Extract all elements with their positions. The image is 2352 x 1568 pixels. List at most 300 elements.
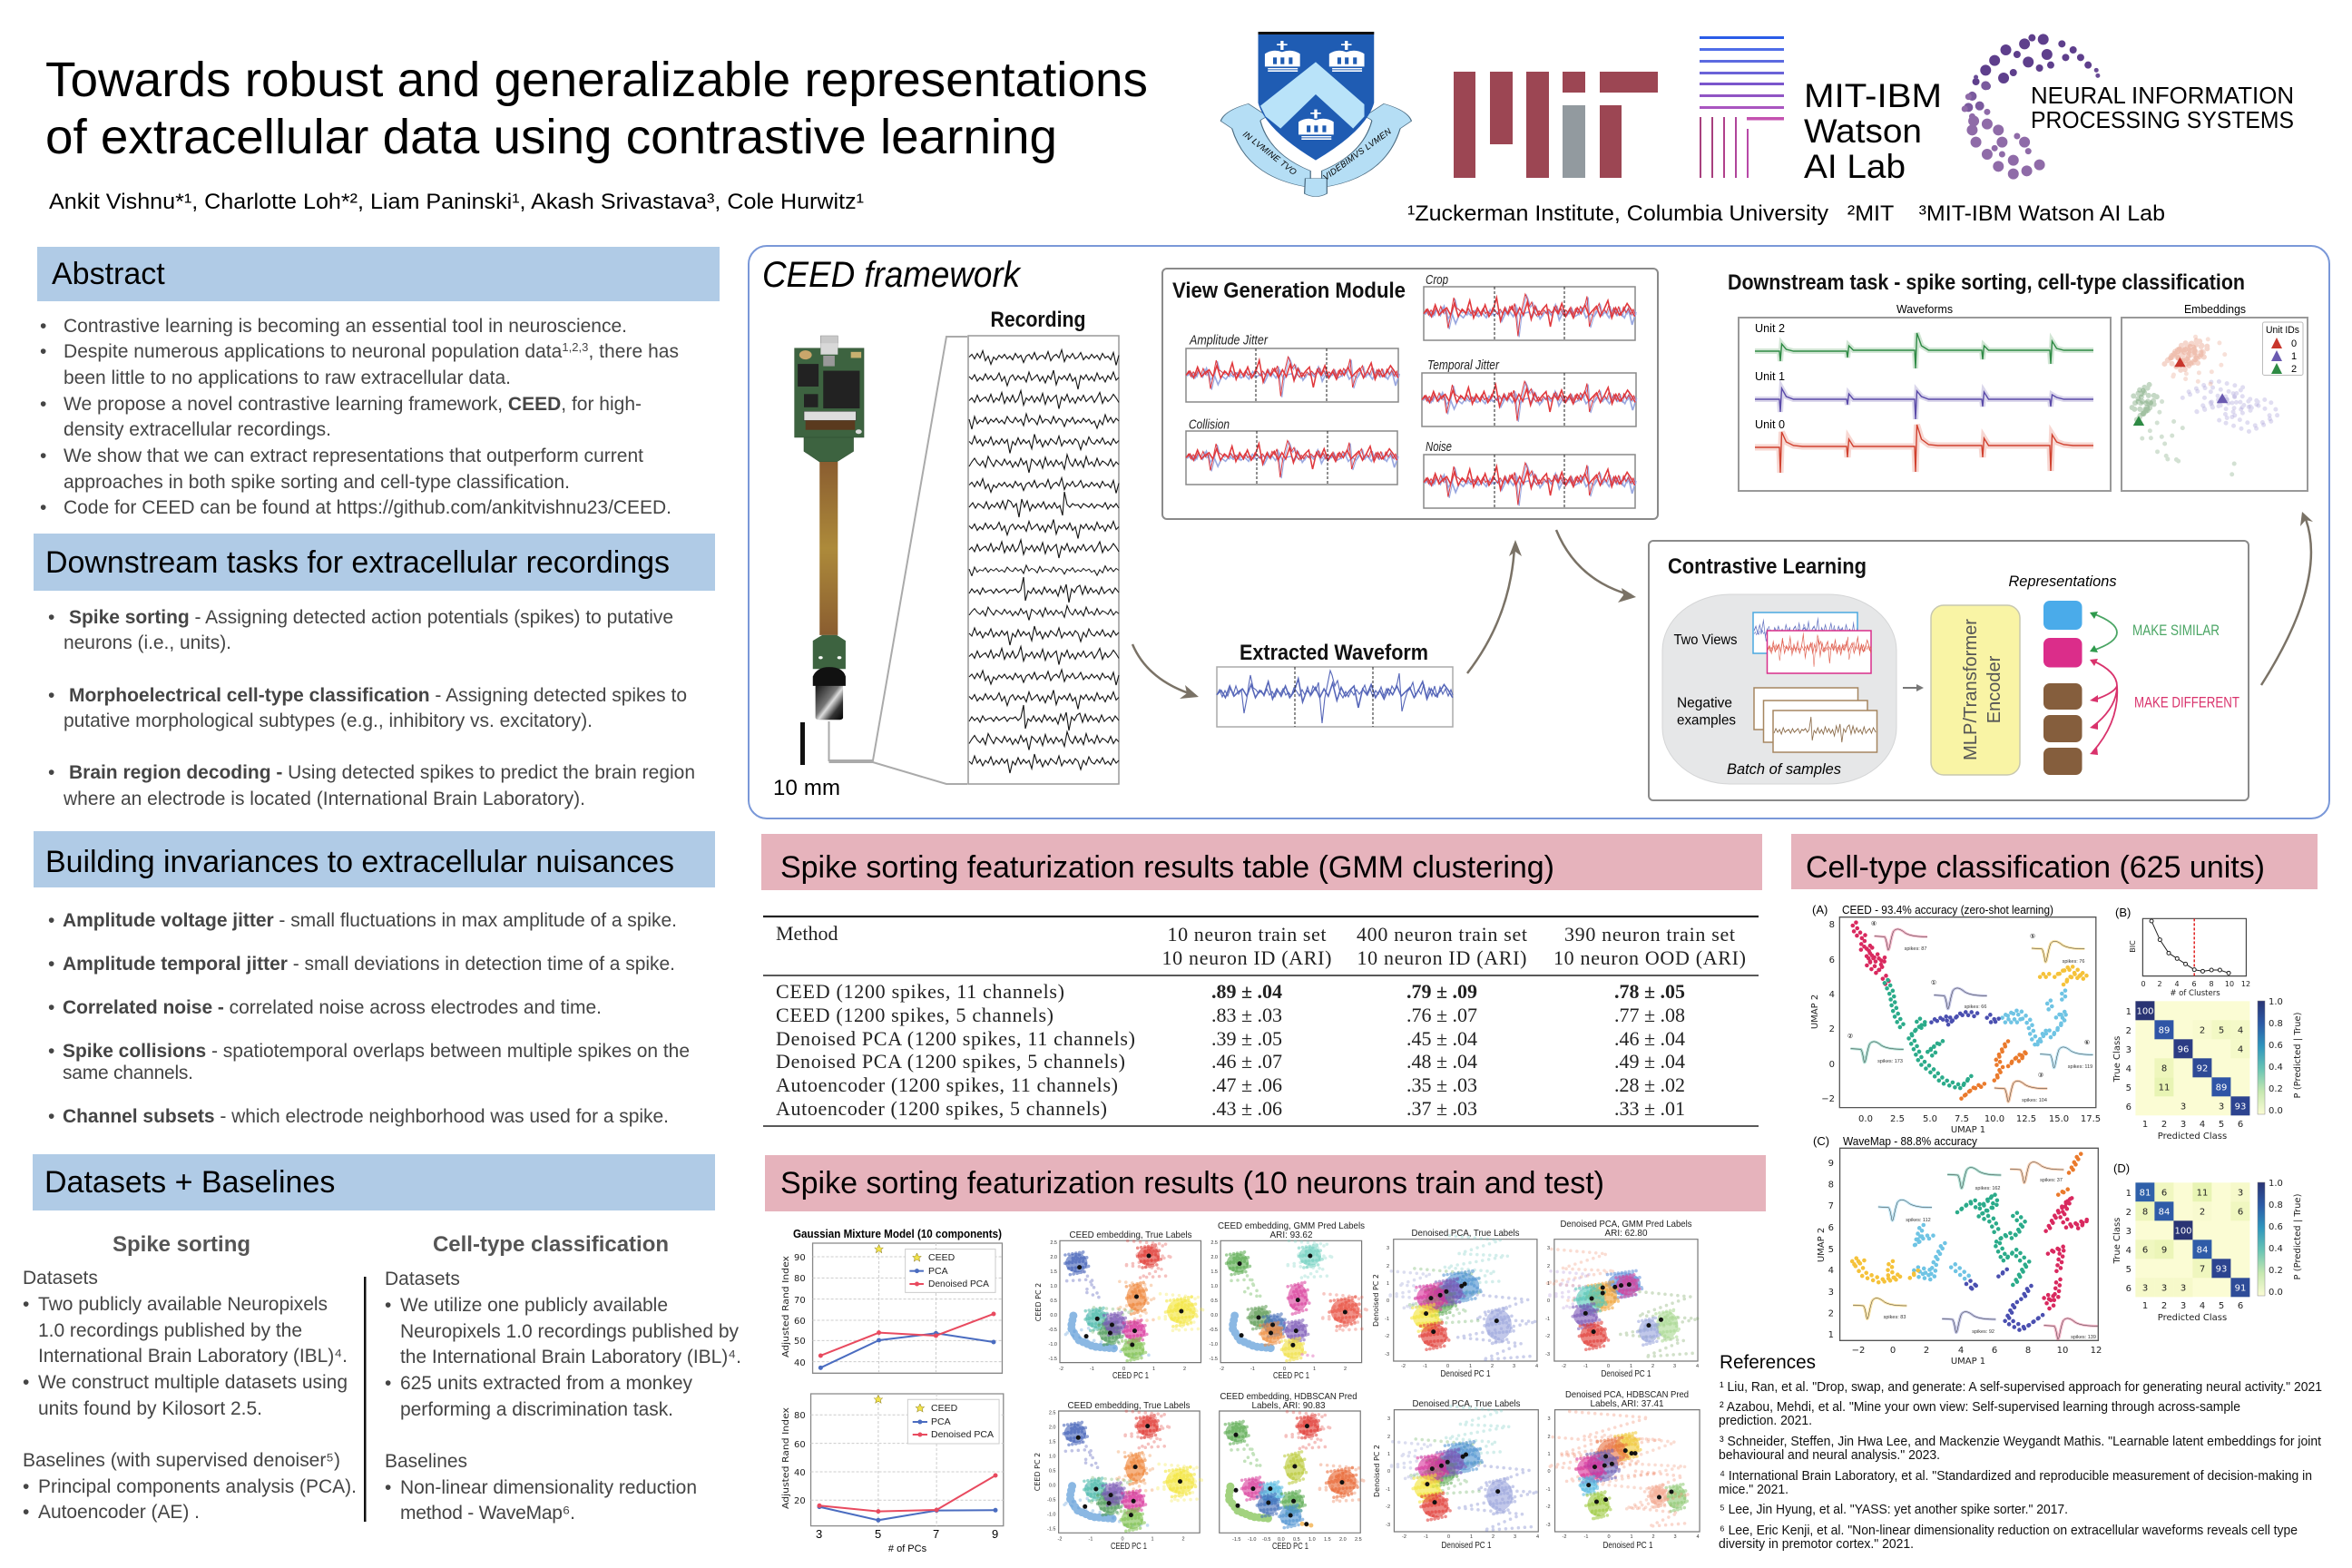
colorbar: P (Predicted | True) [2293,1012,2303,1098]
chart (C): WaveMap UMAP: spikes: 83 [1884,1315,1906,1320]
chart (D): confusion matrix WaveMap: 5 [2219,1301,2224,1311]
colorbar: 0.8 [2269,1019,2283,1029]
chart: denoised PCA HDBSCAN predicted labels [1546,1389,1700,1551]
chart: GMM line plot: 50 [794,1337,806,1347]
downstream text: neurons (i.e., units). [64,632,231,653]
abstract text: , there has [588,341,679,362]
chart (A): CEED UMAP: ⑥ [2084,1039,2090,1046]
panel: building invariances [34,831,715,1127]
column: spike sorting: • [23,1476,29,1497]
chart (A): CEED UMAP: 4 [1829,990,1835,1000]
chart (D): confusion matrix WaveMap: 1 [2126,1189,2132,1199]
chart: GMM line plot: 90 [794,1253,806,1263]
colorbar: 0.6 [2269,1041,2283,1051]
chart (B): BIC curve: 6 [2191,980,2197,988]
chart (C): WaveMap UMAP: 8 [1828,1180,1834,1191]
chart (D): confusion matrix WaveMap: 6 [2238,1207,2243,1218]
chart (D): confusion matrix WaveMap: 2 [2161,1301,2167,1311]
datasets heading: Datasets + Baselines [44,1165,335,1200]
invariances text: • [48,1106,54,1127]
chart: CEED embedding true labels (GMM): CEED PC 2 [1034,1283,1043,1321]
chart (B): BIC curve: 12 [2241,980,2250,988]
column: cell-type classification: • [385,1477,391,1498]
chart (A): CEED UMAP: 5.0 [1923,1114,1937,1124]
results table: .33 ± .01 [1614,1097,1685,1120]
results table: .46 ± .07 [1211,1050,1282,1073]
references: ⁴ International Brain Laboratory, et al. "Standardized and reproducible measurement of decision-making in [1720,1468,2312,1484]
title: Towards robust and generalizable representations [45,53,1148,107]
column: spike sorting: Datasets [23,1268,98,1289]
chart (D): confusion matrix WaveMap: True Class [2112,1218,2122,1264]
references: ² Azabou, Mehdi, et al. "Mine your own view: Self-supervised learning through across-sample [1720,1399,2240,1415]
chart (D): confusion matrix WaveMap: 4 [2200,1301,2205,1311]
results table: Autoencoder (1200 spikes, 5 channels) [776,1097,1107,1120]
recording traces: Recording [991,308,1085,332]
chart (B): BIC curve: 8 [2209,980,2214,988]
chart: confusion matrix CEED: 3 [2180,1120,2186,1130]
invariances heading [34,831,715,887]
chart: unit waveforms: Unit 1 [1755,369,1785,383]
arrow: extracted waveform to view generation [1467,540,1522,673]
abstract text: • [40,316,46,337]
chart: confusion matrix CEED: 89 [2159,1025,2170,1036]
chart (A): CEED UMAP: 17.5 [2081,1114,2101,1124]
chart: denoised PCA GMM predicted labels: Denoised PC 1 [1601,1368,1651,1379]
chart (A): CEED UMAP [1810,903,2101,1135]
invariances text: • [48,954,54,975]
chart: GMM line plot: 70 [794,1296,806,1306]
view: crop [1424,273,1636,340]
results table: CEED (1200 spikes, 5 channels) [776,1004,1054,1026]
chart: CEED embedding HDBSCAN predicted labels: -1.0 [1248,1537,1256,1543]
abstract text [40,316,679,518]
chart: denoised PCA GMM predicted labels: Denoised PCA, GMM Pred Labels [1561,1219,1691,1230]
column: cell-type classification: performing a discrimination task. [400,1399,673,1420]
crest motto: IN LVMINE TVO [1240,130,1298,178]
chart: confusion matrix CEED: 3 [2180,1102,2186,1112]
results table: Denoised PCA (1200 spikes, 5 channels) [776,1050,1125,1073]
heading: featurization results [765,1155,1766,1211]
chart: HDBSCAN line plot: 60 [794,1440,806,1450]
chart: confusion matrix CEED: 92 [2197,1063,2208,1074]
chart: CEED embedding true labels (HDBSCAN): CEED embedding, True Labels [1067,1400,1191,1411]
column: spike sorting: Two publicly available Neuropixels [38,1294,328,1315]
icon: MIT-IBM Watson AI Lab logo: AI Lab [1804,148,1906,185]
column: cell-type classification: 625 units extracted from a monkey [400,1373,693,1394]
chart (C): WaveMap UMAP: 12 [2091,1346,2102,1356]
downstream text: • [48,607,54,628]
column: cell-type classification: We utilize one publicly available [400,1295,668,1316]
affiliations: ¹Zuckerman Institute, Columbia University ²MIT ³MIT-IBM Watson AI Lab [1407,201,2165,226]
references: prediction. 2021. [1719,1413,1812,1428]
view: temporal jitter [1422,358,1637,426]
chart (B): BIC curve: # of Clusters [2170,989,2220,998]
chart: confusion matrix CEED: 2 [2200,1025,2205,1036]
chart (A): CEED UMAP: 7.5 [1955,1114,1969,1124]
results table: .39 ± .05 [1211,1027,1282,1050]
chart: unit embeddings [2122,318,2308,491]
results table: Method [776,922,838,945]
results table: 400 neuron train set [1357,923,1527,946]
chart: HDBSCAN line plot: # of PCs [888,1544,927,1554]
panel: CEED framework [749,246,2329,818]
chart: CEED embedding GMM predicted labels: CEED embedding, GMM Pred Labels [1218,1220,1365,1231]
embeddings legend: 0 [2291,338,2297,349]
abstract text: 1,2,3 [562,340,588,354]
chart: GMM line plot: 40 [794,1358,806,1368]
chart: GMM line plot [781,1227,1002,1373]
chart (C): WaveMap UMAP: WaveMap - 88.8% accuracy [1843,1134,1977,1148]
references: behavioural and neural analysis." 2023. [1719,1447,1940,1463]
chart (A): CEED UMAP: ② [1847,1033,1853,1040]
probe leader lines [829,337,967,784]
downstream text: putative morphological subtypes (e.g., inhibitory vs. excitatory). [64,710,593,731]
chart (C): WaveMap UMAP: 9 [1828,1159,1834,1169]
chart (D): confusion matrix WaveMap: 6 [2142,1245,2148,1256]
column: cell-type classification: the International Brain Laboratory (IBL)⁴. [400,1347,741,1367]
results table: .78 ± .05 [1614,980,1685,1003]
downstream text: • [48,685,54,706]
abstract text: Contrastive learning is becoming an essential tool in neuroscience. [64,316,627,337]
chart: CEED embedding GMM predicted labels [1210,1220,1369,1381]
icon: MIT-IBM Watson AI Lab logo [1700,36,1942,185]
chart: denoised PCA true labels (GMM): Denoised PC 1 [1441,1368,1491,1379]
chart: HDBSCAN line plot: PCA [931,1416,951,1427]
column: spike sorting: • [23,1294,29,1315]
chart (A): CEED UMAP: 0.0 [1858,1114,1873,1124]
results table: 10 neuron ID (ARI) [1357,946,1526,969]
colorbar: 0.2 [2269,1084,2283,1094]
chart (A): CEED UMAP: −2 [1821,1094,1835,1104]
chart: confusion matrix CEED: 4 [2126,1064,2132,1074]
chart: CEED embedding HDBSCAN predicted labels: 2.0 [1339,1537,1347,1543]
chart: confusion matrix CEED: 1 [2126,1007,2132,1017]
chart: confusion matrix CEED: 5 [2126,1083,2132,1093]
chart (D): confusion matrix WaveMap: 2 [2200,1207,2205,1218]
downstream text: Brain region decoding - Using detected spikes to predict the brain region [69,762,695,783]
invariances text: Channel subsets - which electrode neighborhood was used for a spike. [63,1106,669,1127]
arrow: batch to encoder [1903,684,1924,691]
panel: abstract [37,247,720,518]
chart (D): confusion matrix WaveMap: 3 [2238,1189,2243,1198]
chart: unit waveforms: Unit 2 [1755,321,1785,335]
chart (D): confusion matrix WaveMap: 3 [2180,1301,2186,1311]
column: spike sorting: • [23,1502,29,1523]
chart (C): WaveMap UMAP: 4 [1958,1346,1964,1356]
chart: denoised PCA true labels (GMM): Denoised PC 2 [1372,1274,1380,1327]
abstract text: We propose a novel contrastive learning framework, CEED, for high- [64,394,642,415]
chart (A): CEED UMAP: spikes: 66 [1965,1004,1986,1010]
panel: view generation module: View Generation Module [1172,279,1406,303]
chart (D): confusion matrix WaveMap: (D) [2113,1161,2130,1175]
results table: CEED (1200 spikes, 11 channels) [776,980,1064,1003]
chart: confusion matrix CEED: 4 [2238,1045,2243,1054]
panel: contrastive learning: Representations [2009,573,2117,590]
abstract text: been little to no applications to raw extracellular data. [64,368,511,388]
panel: downstream task: Embeddings [2184,302,2246,316]
arrow: recording to extracted waveform [1132,644,1199,699]
chart: unit waveforms: Unit 0 [1755,417,1785,431]
chart: denoised PCA HDBSCAN predicted labels: Labels, ARI: 37.41 [1590,1398,1664,1409]
results table: Autoencoder (1200 spikes, 11 channels) [776,1073,1118,1096]
results table: .77 ± .08 [1614,1004,1685,1026]
view: collision: Collision [1189,417,1230,432]
chart: CEED embedding true labels (HDBSCAN): CEED PC 1 [1111,1541,1147,1552]
chart (C): WaveMap UMAP: UMAP 2 [1817,1228,1827,1262]
results table: .35 ± .03 [1406,1073,1477,1096]
chart: confusion matrix CEED: 4 [2238,1025,2243,1036]
view: noise [1424,440,1636,508]
chart (D): confusion matrix WaveMap: 91 [2235,1283,2246,1294]
colorbar: 0.0 [2269,1288,2283,1298]
colorbar [2258,997,2303,1116]
chart: confusion matrix CEED: True Class [2112,1036,2122,1083]
panel: view generation module [1162,269,1658,519]
icon: MIT-IBM Watson AI Lab logo: Watson [1804,113,1922,150]
chart (B): BIC curve: BIC [2129,940,2137,953]
invariances text: • [48,910,54,931]
results table: .45 ± .04 [1406,1027,1477,1050]
panel: downstream task [1728,270,2308,491]
make similar arrows [2090,612,2220,652]
references [1719,1352,2322,1552]
column: cell-type classification: Baselines [385,1451,467,1472]
extracted waveform: Extracted Waveform [1240,641,1428,665]
invariances text: Spike collisions - spatiotemporal overlaps between multiple spikes on the [63,1041,690,1062]
abstract text: • [40,394,46,415]
chart: confusion matrix CEED: 89 [2216,1083,2227,1093]
embeddings legend: 1 [2291,351,2297,362]
chart (D): confusion matrix WaveMap: 3 [2180,1283,2186,1294]
colorbar: 1.0 [2269,997,2283,1007]
chart (B): BIC curve: (B) [2115,906,2131,919]
heading: featurization results: Spike sorting featurization results (10 neurons train and test) [780,1166,1604,1200]
chart (C): WaveMap UMAP: 5 [1828,1245,1834,1255]
batch of samples [1662,594,1896,784]
results table: .43 ± .06 [1211,1097,1282,1120]
panel: contrastive learning [1649,541,2249,800]
invariances text: Amplitude voltage jitter - small fluctuations in max amplitude of a spike. [63,910,677,931]
downstream text: • [48,762,54,783]
chart (C): WaveMap UMAP: spikes: 162 [1975,1186,2001,1191]
view: amplitude jitter [1186,334,1399,402]
colorbar: 1.0 [2269,1179,2283,1189]
chart: GMM line plot: 60 [794,1317,806,1327]
embeddings legend [2263,322,2303,376]
chart: confusion matrix CEED: 96 [2178,1045,2189,1054]
results table: .89 ± .04 [1211,980,1282,1003]
chart (A): CEED UMAP: (A) [1812,903,1828,916]
chart (D): confusion matrix WaveMap: 3 [2126,1227,2132,1237]
results table: Denoised PCA (1200 spikes, 11 channels) [776,1027,1135,1050]
chart: CEED embedding HDBSCAN predicted labels: -0.5 [1262,1537,1270,1543]
chart (C): WaveMap UMAP: UMAP 1 [1951,1357,1985,1367]
chart (D): confusion matrix WaveMap: 7 [2200,1265,2205,1274]
chart: denoised PCA true labels (HDBSCAN): Denoised PC 1 [1441,1540,1492,1551]
chart (D): confusion matrix WaveMap: 84 [2159,1207,2170,1218]
chart: GMM line plot: CEED [928,1252,956,1263]
chart (A): CEED UMAP: 8 [1829,920,1835,930]
chart (A): CEED UMAP: 6 [1829,956,1835,965]
abstract text: We show that we can extract representations that outperform current [64,446,643,466]
column: spike sorting: Principal components analysis (PCA). [38,1476,357,1497]
chart (D): confusion matrix WaveMap: 9 [2161,1245,2167,1256]
chart (B): BIC curve: 10 [2225,980,2234,988]
chart: HDBSCAN line plot: 5 [875,1527,881,1541]
chart (A): CEED UMAP: 2.5 [1890,1114,1905,1124]
chart (D): confusion matrix WaveMap [2112,1161,2303,1323]
chart (D): confusion matrix WaveMap: 1 [2142,1301,2148,1311]
chart (C): WaveMap UMAP: spikes: 92 [1972,1329,1994,1335]
make different arrows [2090,659,2239,755]
title [45,53,1148,164]
chart: HDBSCAN line plot: 40 [794,1468,806,1478]
make different arrows: MAKE DIFFERENT [2134,693,2239,711]
chart: CEED embedding HDBSCAN predicted labels: -1.5 [1232,1537,1240,1543]
encoder box: Encoder [1984,655,2004,723]
column: spike sorting [23,1232,357,1523]
chart: GMM line plot: 80 [794,1274,806,1284]
panel: downstream tasks [34,534,715,809]
column: cell-type classification: method - WaveMap⁶. [400,1503,575,1524]
results table: 390 neuron train set [1564,923,1735,946]
chart: CEED embedding HDBSCAN predicted labels: CEED embedding, HDBSCAN Pred [1220,1391,1357,1402]
chart: CEED embedding true labels (GMM): CEED PC 1 [1112,1370,1149,1381]
results table: .37 ± .03 [1406,1097,1477,1120]
references: References [1720,1352,1816,1373]
chart (A): CEED UMAP: 2 [1829,1024,1835,1034]
references: ⁶ Lee, Eric Kenji, et al. "Non-linear dimensionality reduction on extracellular waveforms reveals cell type [1720,1523,2298,1538]
chart (D): confusion matrix WaveMap: 3 [2142,1283,2148,1294]
chart: denoised PCA true labels (HDBSCAN): Denoised PC 2 [1373,1445,1381,1497]
embeddings legend: 2 [2291,364,2297,375]
results table: .49 ± .04 [1614,1050,1685,1073]
column: cell-type classification: Cell-type classification [433,1232,669,1257]
chart: denoised PCA GMM predicted labels: ARI: 62.80 [1604,1228,1648,1239]
chart: denoised PCA HDBSCAN predicted labels: Denoised PCA, HDBSCAN Pred [1565,1389,1689,1400]
view: crop: Crop [1426,273,1448,288]
chart (D): confusion matrix WaveMap: 5 [2126,1265,2132,1275]
chart: confusion matrix CEED: 2 [2126,1026,2132,1036]
column: spike sorting: Autoencoder (AE) . [38,1502,200,1523]
chart (D): confusion matrix WaveMap: 84 [2197,1245,2208,1256]
chart: confusion matrix CEED: 5 [2219,1025,2224,1036]
arrow: contrastive learning to downstream task [2261,512,2313,685]
chart (D): confusion matrix WaveMap: 93 [2216,1265,2227,1274]
chart: CEED embedding true labels (HDBSCAN): CEED PC 2 [1034,1453,1042,1491]
chart (A): CEED UMAP: 15.0 [2049,1114,2069,1124]
chart (C): WaveMap UMAP: 3 [1828,1288,1834,1298]
chart (C): WaveMap UMAP: 6 [1992,1346,1997,1356]
column: cell-type classification [385,1232,741,1524]
chart (A): CEED UMAP: 12.5 [2016,1114,2036,1124]
chart (D): confusion matrix WaveMap: 11 [2197,1189,2208,1198]
chart: HDBSCAN line plot: CEED [931,1403,958,1414]
column: cell-type classification: • [385,1373,391,1394]
column: cell-type classification: Non-linear dimensionality reduction [400,1477,697,1498]
chart (A): CEED UMAP: 10.0 [1984,1114,2004,1124]
column: spike sorting: units found by Kilosort 2.5. [38,1398,262,1419]
view: collision [1186,417,1398,485]
chart: confusion matrix CEED: 3 [2126,1045,2132,1055]
view: noise: Noise [1426,440,1452,455]
icon: NeurIPS logo: PROCESSING SYSTEMS [2031,106,2294,133]
chart (A): CEED UMAP: 0 [1829,1060,1835,1070]
abstract text: approaches in both spike sorting and cell-type classification. [64,472,570,493]
icon: Columbia University crest [1220,32,1411,197]
chart: confusion matrix CEED: 11 [2159,1083,2170,1093]
chart (C): WaveMap UMAP: 0 [1890,1346,1896,1356]
chart: CEED embedding GMM predicted labels: CEED PC 1 [1273,1370,1309,1381]
colorbar: 0.8 [2269,1200,2283,1210]
chart: confusion matrix CEED: 4 [2200,1120,2205,1130]
downstream text: where an electrode is located (International Brain Laboratory). [63,789,585,809]
encoder box [1931,605,2020,775]
chart (A): CEED UMAP: UMAP 1 [1951,1125,1985,1135]
chart: denoised PCA true labels (GMM): Denoised PCA, True Labels [1412,1228,1519,1239]
chart (D): confusion matrix WaveMap: 6 [2126,1284,2132,1294]
chart: confusion matrix CEED: 100 [2136,1007,2154,1016]
scale bar: 10 mm [773,776,840,800]
results table: .48 ± .04 [1406,1050,1477,1073]
chart (C): WaveMap UMAP: 10 [2057,1346,2068,1356]
chart (A): CEED UMAP: spikes: 76 [2063,959,2084,965]
chart: HDBSCAN line plot: 3 [816,1527,822,1541]
chart (C): WaveMap UMAP: −2 [1852,1346,1865,1356]
chart (C): WaveMap UMAP: spikes: 112 [1906,1218,1931,1223]
authors: Ankit Vishnu*¹, Charlotte Loh*², Liam Paninski¹, Akash Srivastava³, Cole Hurwitz¹ [49,190,864,214]
column: cell-type classification: Datasets [385,1269,460,1289]
icon: MIT logo [1454,72,1658,178]
icon: MIT-IBM Watson AI Lab logo: MIT-IBM [1804,77,1942,114]
chart: confusion matrix CEED: 3 [2219,1102,2224,1112]
view: amplitude jitter: Amplitude Jitter [1189,334,1269,348]
chart (A): CEED UMAP: ① [1931,979,1936,986]
downstream heading [34,534,715,591]
abstract text: density extracellular recordings. [64,419,331,440]
chart (C): WaveMap UMAP: 8 [2025,1346,2031,1356]
chart: CEED embedding HDBSCAN predicted labels: Labels, ARI: 90.83 [1252,1400,1326,1411]
chart (B): BIC curve: 2 [2157,980,2162,988]
chart (D): confusion matrix WaveMap: 3 [2161,1283,2167,1294]
results table: 10 neuron train set [1167,923,1327,946]
column: spike sorting: Spike sorting [113,1232,250,1257]
invariances text: Correlated noise - correlated noise across electrodes and time. [63,997,602,1018]
chart: denoised PCA HDBSCAN predicted labels: Denoised PC 1 [1602,1540,1653,1551]
invariances text: • [48,1041,54,1062]
chart (C): WaveMap UMAP: spikes: 139 [2071,1335,2096,1340]
panel: downstream task: Downstream task - spike sorting, cell-type classification [1728,270,2245,295]
title: of extracellular data using contrastive learning [45,110,1057,164]
panel: contrastive learning: Contrastive Learning [1668,554,1867,579]
chart (C): WaveMap UMAP [1813,1134,2102,1367]
abstract text: Code for CEED can be found at https://github.com/ankitvishnu23/CEED. [64,497,671,518]
chart: HDBSCAN line plot: 9 [992,1527,998,1541]
chart: GMM line plot: PCA [928,1266,948,1277]
chart: GMM line plot: Denoised PCA [928,1279,989,1289]
references: ³ Schneider, Steffen, Jin Hwa Lee, and Mackenzie Weygandt Mathis. "Learnable latent embeddings for joint [1720,1434,2322,1449]
downstream text: Spike sorting - Assigning detected action potentials (spikes) to putative [69,607,673,628]
chart (D): confusion matrix WaveMap: 2 [2126,1208,2132,1218]
chart: denoised PCA true labels (GMM) [1372,1228,1538,1379]
chart (A): CEED UMAP: spikes: 173 [1877,1059,1903,1064]
heading: results table: Spike sorting featurization results table (GMM clustering) [780,850,1554,885]
references: ¹ Liu, Ran, et al. "Drop, swap, and generate: A self-supervised approach for generating neural activity." 2021 [1720,1379,2322,1395]
chart: HDBSCAN line plot: Denoised PCA [931,1429,994,1440]
abstract heading [37,247,720,301]
abstract text: Despite numerous applications to neuronal population data [64,341,562,362]
arrow: view generation to contrastive learning [1556,530,1636,603]
